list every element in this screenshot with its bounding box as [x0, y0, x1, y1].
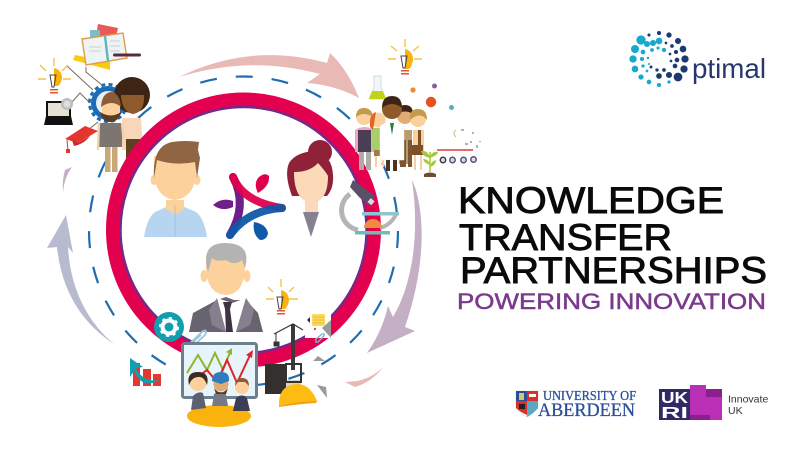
figure: senior man in suit	[189, 243, 263, 332]
illustration: team of five people	[355, 96, 427, 171]
illustration: top-left team cluster	[67, 24, 150, 172]
logo: central triskele	[213, 174, 282, 240]
main ring	[113, 100, 374, 360]
arrow: top cycle arrow	[179, 53, 359, 98]
chart: presentation board with rising lines	[182, 344, 256, 398]
icon: laptop with magnifier	[44, 98, 73, 125]
icon: yellow hard hat	[279, 384, 317, 407]
icon: lightbulb top-left	[38, 58, 71, 94]
logo: Optimal dots and wordmark: ptimal	[692, 53, 766, 84]
decorative mini icons: red line and wheels	[437, 130, 480, 163]
icon: paperclip	[188, 330, 206, 348]
logo: Optimal dots and wordmark	[630, 31, 766, 87]
title: Knowledge Transfer Partnerships	[458, 179, 767, 291]
illustration: construction crane and plant	[265, 324, 303, 394]
title: Knowledge Transfer Partnerships: PARTNERSHIPS	[460, 249, 767, 291]
figure: man with brown hair	[144, 141, 207, 237]
icon: science flask	[369, 76, 386, 99]
science dots	[410, 84, 454, 110]
logo: UKRI Innovate UK: UK	[661, 390, 689, 407]
icon: sprouting plant	[421, 151, 438, 177]
icon: small paperclip right	[315, 334, 324, 342]
arrow: left cycle arrow	[47, 215, 114, 344]
icon: lightbulb top-right	[388, 39, 422, 74]
arrow: left arrow upper tail	[63, 167, 72, 193]
subtitle: Powering Innovation: POWERING INNOVATION	[457, 289, 766, 314]
logo: UKRI Innovate UK: Innovate	[728, 394, 768, 406]
icon: teal gear badge	[154, 312, 184, 342]
icon: bar chart with arrow	[130, 358, 161, 386]
logo: University of Aberdeen	[516, 388, 636, 421]
arrow: right cycle arrow	[367, 180, 422, 353]
logo: UKRI Innovate UK: UK	[728, 405, 743, 417]
ring gap behind note icon	[305, 302, 331, 338]
icon: red graduation cap	[65, 126, 98, 153]
title: Knowledge Transfer Partnerships: KNOWLEDGE	[458, 179, 724, 221]
icon: microscope	[342, 180, 399, 234]
arrow: small bottom arrow	[345, 367, 383, 387]
logo: UKRI Innovate UK: RI	[661, 405, 688, 422]
figure: woman with red hair	[287, 140, 333, 237]
dashed orbit circle	[89, 76, 398, 386]
logo: University of Aberdeen: UNIVERSITY OF	[543, 388, 636, 403]
logo: UKRI Innovate UK	[659, 385, 768, 422]
illustration: meeting table with three people	[187, 372, 251, 427]
title: Knowledge Transfer Partnerships: TRANSFER	[459, 216, 672, 258]
icon: yellow note	[307, 314, 331, 398]
logo: University of Aberdeen: ABERDEEN	[538, 400, 635, 421]
icon: lightbulb near suit	[266, 279, 298, 314]
